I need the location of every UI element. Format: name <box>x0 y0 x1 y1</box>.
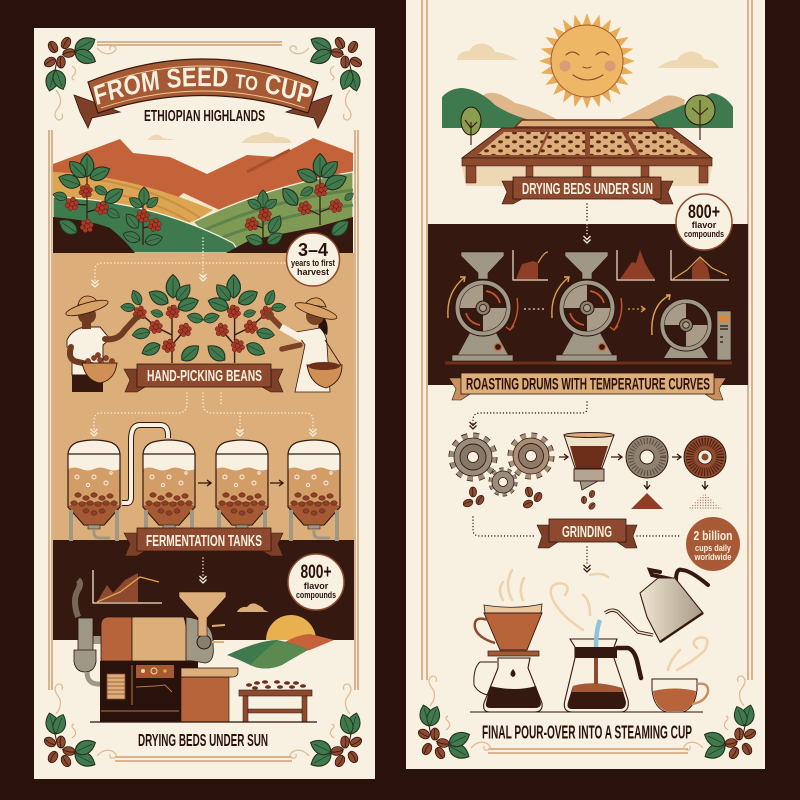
section: dark roasting drums <box>428 224 748 385</box>
coffee plants <box>52 154 355 248</box>
badge: 3-4 years: 3–4 <box>298 240 328 260</box>
arrow <box>200 558 206 583</box>
ribbon: grinding <box>537 519 637 548</box>
picker: woman <box>267 298 342 392</box>
right coffee bush <box>202 275 286 365</box>
badge: 3-4 years <box>286 233 340 286</box>
subtitle: ETHIOPIAN HIGHLANDS <box>144 108 265 125</box>
floor <box>445 362 732 364</box>
clouds <box>457 44 719 68</box>
grinding disc coarse <box>626 436 668 478</box>
serving carafe <box>564 620 641 712</box>
badge: 800+ <box>676 194 732 250</box>
arrow <box>584 204 590 243</box>
roasting drum 1 <box>448 252 518 361</box>
arrows: dotted flows to picking <box>94 238 313 432</box>
left coffee bush <box>120 275 204 365</box>
badge: 800+: flavor <box>304 581 329 591</box>
badge: 3-4 years: years to first <box>291 258 335 268</box>
badge: 800+: compounds <box>296 590 336 600</box>
drying landscape <box>227 603 334 668</box>
small flow arrows <box>559 454 708 489</box>
badge: 800+ <box>288 554 344 610</box>
ribbon: roasting <box>449 373 726 400</box>
chart: curve 2 <box>617 250 655 280</box>
badge: 2 billion: cups daily <box>695 543 732 554</box>
ribbon: fermentation <box>124 528 283 556</box>
badge: 800+: 800+ <box>300 562 332 583</box>
badge: 800+: flavor <box>692 220 717 230</box>
chart: roast curve <box>93 570 162 603</box>
roasting drum 2 <box>552 252 622 361</box>
grinder funnel <box>564 432 614 490</box>
arrows: dotted flows grinding <box>473 402 681 566</box>
badge: 3-4 years: harvest <box>297 267 329 277</box>
drying bed <box>462 120 712 186</box>
steam <box>500 570 707 670</box>
drying table <box>90 680 317 722</box>
corner ornaments right panel <box>417 676 757 762</box>
flow arrows between drums <box>524 306 645 312</box>
chart: curve 3 <box>671 250 729 280</box>
grinding disc fine <box>684 436 726 478</box>
arrowheads <box>90 274 316 436</box>
arrowheads <box>470 422 590 572</box>
ribbon: hand-picking <box>124 364 283 392</box>
section: highlands landscape <box>52 130 355 253</box>
transfer pipe <box>122 425 168 503</box>
title text: FROM SEED TO CUP <box>93 68 312 105</box>
kettle <box>605 570 708 642</box>
corner ornaments left panel <box>43 34 363 770</box>
picker: man <box>64 296 137 392</box>
roasting drum 3 <box>652 295 731 360</box>
ribbon: fermentation: FERMENTATION TANKS <box>146 533 262 550</box>
section: tan harvest and fermentation <box>53 253 354 541</box>
picking plants <box>120 275 286 365</box>
ribbon: drying beds <box>502 177 673 204</box>
dripper and carafe <box>474 604 542 712</box>
badge: 2 billion <box>686 517 740 571</box>
badge: 2 billion: worldwide <box>694 552 732 563</box>
section: dark roasting <box>53 540 354 640</box>
sun <box>539 13 635 109</box>
caption: drying beds: DRYING BEDS UNDER SUN <box>138 730 268 750</box>
panel: right poster <box>406 0 765 769</box>
frame lines right <box>422 0 752 753</box>
roaster machine <box>74 580 238 722</box>
hills <box>442 88 733 128</box>
trees <box>461 95 715 145</box>
ribbon: hand-picking: HAND-PICKING BEANS <box>147 368 262 385</box>
ribbon: grinding: GRINDING <box>562 524 612 541</box>
badge: 800+: 800+ <box>688 202 720 223</box>
frame lines left <box>49 42 358 761</box>
coffee beans <box>462 486 596 511</box>
gears <box>452 436 551 494</box>
panel: left poster <box>34 28 375 779</box>
chart: curve 1 <box>513 250 548 280</box>
badge: 2 billion: 2 billion <box>694 528 733 543</box>
coarse grounds pile <box>631 493 663 509</box>
fermentation tanks <box>68 425 340 541</box>
title ribbon <box>73 58 333 129</box>
coffee cup <box>652 679 708 712</box>
fine grounds pile <box>688 493 722 509</box>
ground line <box>470 711 703 713</box>
badge: 800+: compounds <box>684 229 724 239</box>
ribbon: drying beds: DRYING BEDS UNDER SUN <box>522 181 653 198</box>
